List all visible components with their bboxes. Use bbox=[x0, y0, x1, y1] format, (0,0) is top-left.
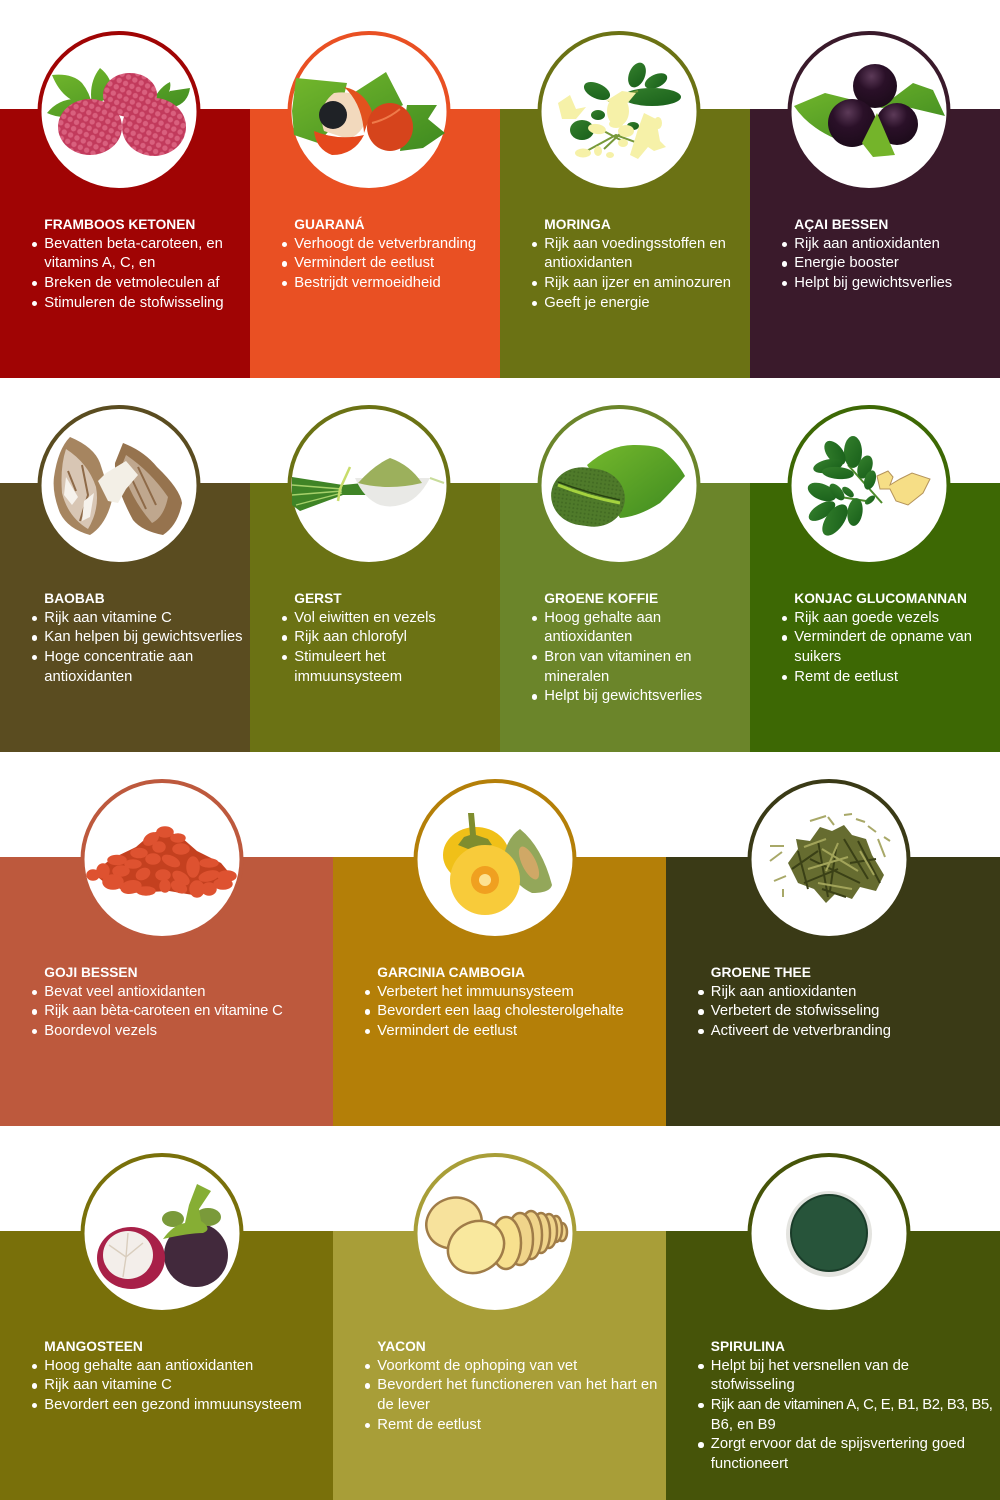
benefits list: Kan helpen bij gewichtsverlies bbox=[44, 629, 243, 645]
benefits list: Verbetert het immuunsysteem bbox=[377, 984, 574, 1000]
benefits list bbox=[698, 984, 891, 1039]
benefits list bbox=[532, 610, 702, 704]
benefits list: Rijk aan ijzer en aminozuren bbox=[544, 275, 731, 291]
heading: SPIRULINA bbox=[711, 1338, 785, 1354]
benefits list: Bevordert een laag cholesterolgehalte bbox=[377, 1003, 624, 1019]
benefits list: Hoog gehalte aan bbox=[544, 610, 661, 626]
benefits list: de lever bbox=[377, 1397, 430, 1413]
benefits list: Vermindert de opname van bbox=[794, 629, 972, 645]
panel: Yacon bbox=[333, 1153, 666, 1500]
benefits list: vitamins A, C, en bbox=[44, 255, 155, 271]
benefits list: immuunsysteem bbox=[294, 669, 402, 685]
icon: mangosteen bbox=[80, 1153, 244, 1310]
benefits list: Remt de eetlust bbox=[794, 669, 898, 685]
icon: guarana fruit bbox=[288, 31, 450, 188]
benefits list: Vermindert de eetlust bbox=[294, 255, 434, 271]
benefits list: antioxidanten bbox=[44, 669, 132, 685]
icon: moringa flowers bbox=[538, 31, 700, 188]
panel: Mangosteen bbox=[0, 1153, 333, 1500]
heading: GERST bbox=[294, 590, 342, 606]
panel: Açai Bessen bbox=[750, 31, 1000, 378]
colour band bbox=[500, 483, 750, 752]
colour band bbox=[0, 483, 250, 752]
benefits list: Zorgt ervoor dat de spijsvertering goed bbox=[711, 1436, 965, 1452]
benefits list: Rijk aan vitamine C bbox=[44, 610, 172, 626]
benefits list bbox=[782, 236, 952, 291]
panel: Konjac Glucomannan bbox=[750, 405, 1000, 752]
icon: green tea leaves bbox=[748, 779, 910, 936]
benefits list: Boordevol vezels bbox=[44, 1023, 157, 1039]
benefits list: Verbetert de stofwisseling bbox=[711, 1003, 879, 1019]
colour band bbox=[0, 857, 333, 1126]
heading: GROENE THEE bbox=[711, 964, 811, 980]
panel: Garcinia Cambogia bbox=[333, 779, 666, 1126]
benefits list: Rijk aan goede vezels bbox=[794, 610, 939, 626]
heading: GOJI BESSEN bbox=[44, 964, 138, 980]
colour band bbox=[750, 483, 1000, 752]
colour band bbox=[500, 109, 750, 378]
heading: AÇAI BESSEN bbox=[794, 216, 888, 232]
colour band bbox=[250, 109, 500, 378]
benefits list: Helpt bij het versnellen van de bbox=[711, 1358, 909, 1374]
benefits list: Voorkomt de ophoping van vet bbox=[377, 1358, 577, 1374]
benefits list: Rijk aan bèta-caroteen en vitamine C bbox=[44, 1003, 283, 1019]
benefits list bbox=[282, 236, 476, 291]
benefits list bbox=[532, 236, 731, 311]
benefits list: Helpt bij gewichtsverlies bbox=[544, 688, 702, 704]
benefits list: Bevat veel antioxidanten bbox=[44, 984, 206, 1000]
benefits list bbox=[782, 610, 972, 685]
colour band bbox=[250, 483, 500, 752]
icon: konjac leaves and root bbox=[788, 405, 950, 562]
benefits list: Bevatten beta-caroteen, en bbox=[44, 236, 223, 252]
benefits list bbox=[32, 984, 283, 1039]
heading: GROENE KOFFIE bbox=[544, 590, 658, 606]
benefits list: Bestrijdt vermoeidheid bbox=[294, 275, 441, 291]
benefits list bbox=[365, 984, 624, 1039]
benefits list: Energie booster bbox=[794, 255, 899, 271]
benefits list bbox=[32, 1358, 302, 1413]
benefits list bbox=[32, 236, 224, 311]
colour band bbox=[750, 109, 1000, 378]
heading: MANGOSTEEN bbox=[44, 1338, 143, 1354]
heading: BAOBAB bbox=[44, 590, 105, 606]
benefits list: antioxidanten bbox=[544, 255, 632, 271]
colour band bbox=[0, 109, 250, 378]
benefits list bbox=[282, 610, 436, 685]
benefits list bbox=[711, 1356, 993, 1475]
panel: Baobab bbox=[0, 405, 250, 752]
benefits list: B6, en B9 bbox=[711, 1417, 776, 1433]
benefits list: Remt de eetlust bbox=[377, 1417, 481, 1433]
benefits list: Rijk aan antioxidanten bbox=[794, 236, 940, 252]
benefits list: Bevordert een gezond immuunsysteem bbox=[44, 1397, 302, 1413]
panel: Framboos Ketonen bbox=[0, 31, 250, 378]
benefits list: Rijk aan antioxidanten bbox=[711, 984, 856, 1000]
panel: Gerst bbox=[250, 405, 500, 752]
benefits list: Bevordert het functioneren van het hart en bbox=[377, 1377, 657, 1393]
benefits list: mineralen bbox=[544, 669, 609, 685]
benefits list: Breken de vetmoleculen af bbox=[44, 275, 220, 291]
benefits list: Rijk aan vitamine C bbox=[44, 1377, 172, 1393]
panel: Spirulina bbox=[666, 1153, 1000, 1500]
colour band bbox=[333, 1231, 666, 1500]
colour band bbox=[0, 1231, 333, 1500]
heading: FRAMBOOS KETONEN bbox=[44, 216, 195, 232]
colour band bbox=[666, 857, 1000, 1126]
benefits list: Activeert de vetverbranding bbox=[711, 1023, 891, 1039]
heading: GUARANÁ bbox=[294, 216, 365, 232]
heading: MORINGA bbox=[544, 216, 611, 232]
benefits list: Rijk aan voedingsstoffen en bbox=[544, 236, 726, 252]
heading: YACON bbox=[377, 1338, 426, 1354]
panel: Guaraná bbox=[250, 31, 500, 378]
icon: green coffee bean and leaf bbox=[538, 405, 700, 562]
icon: baobab fruit bbox=[38, 405, 200, 562]
benefits list: functioneert bbox=[711, 1456, 788, 1472]
icon: spirulina powder bowl bbox=[748, 1153, 910, 1315]
benefits list: antioxidanten bbox=[544, 629, 632, 645]
heading: GARCINIA CAMBOGIA bbox=[377, 964, 525, 980]
panel: Goji Bessen bbox=[0, 779, 333, 1126]
benefits list: stofwisseling bbox=[711, 1377, 795, 1393]
icon: yacon slices bbox=[414, 1153, 576, 1310]
panel: Groene Thee bbox=[666, 779, 1000, 1126]
panel: Groene Koffie bbox=[500, 405, 750, 752]
benefits list: Vermindert de eetlust bbox=[377, 1023, 517, 1039]
benefits list: Rijk aan chlorofyl bbox=[294, 629, 407, 645]
icon: goji berries bbox=[80, 779, 244, 936]
panel: Moringa bbox=[500, 31, 750, 378]
benefits list: Geeft je energie bbox=[544, 295, 650, 311]
benefits list bbox=[365, 1358, 657, 1433]
colour band bbox=[666, 1231, 1000, 1500]
benefits list: Verhoogt de vetverbranding bbox=[294, 236, 476, 252]
heading: KONJAC GLUCOMANNAN bbox=[794, 590, 967, 606]
benefits list bbox=[32, 610, 243, 685]
benefits list: Hoge concentratie aan bbox=[44, 649, 193, 665]
icon: acai berries bbox=[788, 31, 950, 188]
benefits list: Stimuleren de stofwisseling bbox=[44, 295, 224, 311]
benefits list: Bron van vitaminen en bbox=[544, 649, 692, 665]
icon: garcinia fruit bbox=[414, 779, 576, 936]
colour band bbox=[333, 857, 666, 1126]
benefits list: suikers bbox=[794, 649, 841, 665]
benefits list: Helpt bij gewichtsverlies bbox=[794, 275, 952, 291]
benefits list: Vol eiwitten en vezels bbox=[294, 610, 436, 626]
icon: raspberries bbox=[38, 31, 200, 188]
benefits list: Hoog gehalte aan antioxidanten bbox=[44, 1358, 253, 1374]
icon: barley grass and powder bbox=[288, 405, 450, 562]
benefits list: Rijk aan de vitaminen A, C, E, B1, B2, B3, B5, bbox=[711, 1397, 993, 1413]
benefits list: Stimuleert het bbox=[294, 649, 386, 665]
